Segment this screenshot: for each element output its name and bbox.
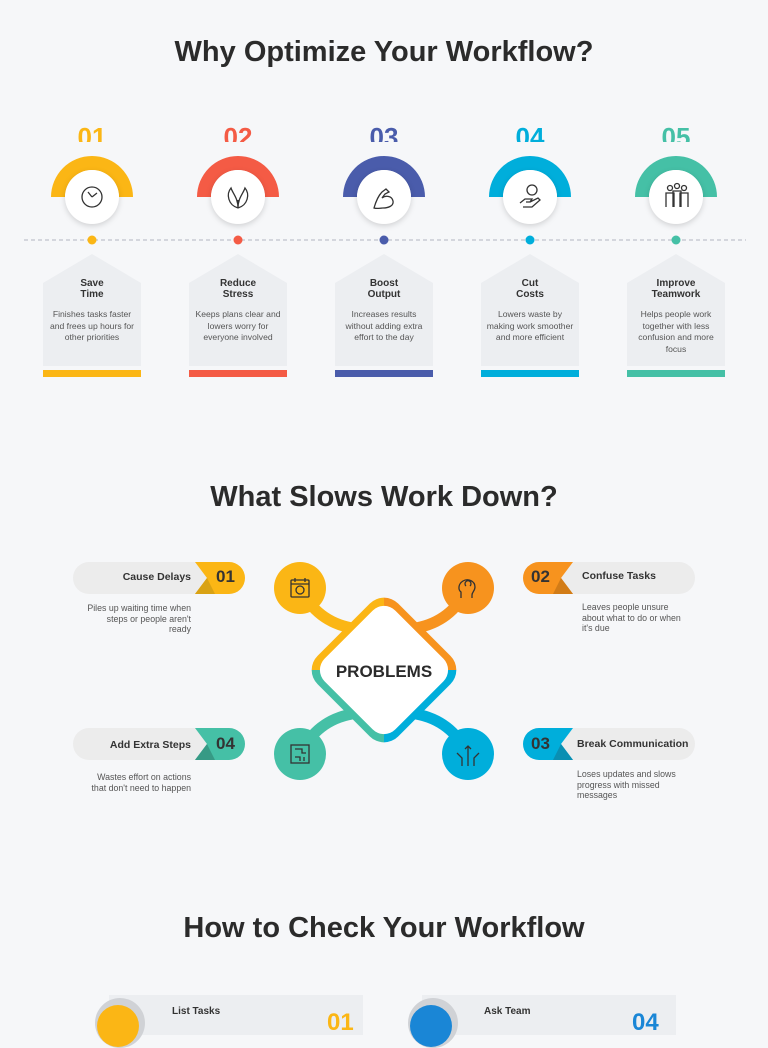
title: what slows work down: What Slows Work Down?	[210, 481, 558, 513]
step 04 cut costs: Cut	[522, 278, 538, 289]
step 01 save time: Save	[80, 278, 104, 289]
check card 04 ask team: Ask Team	[484, 1006, 531, 1017]
check card 01 list tasks: List Tasks	[172, 1006, 220, 1017]
step 03 boost output: Output	[368, 289, 400, 300]
problem 01 cause delays: 01	[216, 567, 235, 586]
problem 04 add extra steps: Wastes effort on actions that don't need to happen	[91, 772, 191, 792]
problem 01 cause delays: Cause Delays	[123, 571, 191, 583]
connectors	[300, 588, 468, 754]
title: how to check: How to Check Your Workflow	[183, 912, 585, 944]
check card 01 list tasks: 01	[327, 1009, 354, 1036]
step 05 improve teamwork: Helps people work together with less confusion and more focus	[638, 309, 714, 354]
step 04 cut costs	[481, 122, 579, 377]
step 02 reduce stress: Stress	[223, 289, 253, 300]
circles	[274, 562, 326, 614]
step 04 cut costs: Lowers waste by making work smoother and more efficient	[487, 309, 573, 342]
step 01 save time: Finishes tasks faster and frees up hours for other priorities	[50, 309, 134, 342]
check card 04 ask team	[408, 995, 676, 1048]
diamond ring	[312, 598, 456, 742]
step 03 boost output	[335, 122, 433, 377]
problem 04 add extra steps: Add Extra Steps	[110, 739, 191, 751]
step 03 boost output: Increases results without adding extra effort to the day	[346, 309, 422, 342]
problem 01 cause delays: Piles up waiting time when steps or people aren't ready	[87, 603, 191, 634]
check card 01 list tasks	[95, 995, 363, 1048]
problem 02 confuse tasks: 02	[531, 567, 550, 586]
problem 01 cause delays	[73, 562, 245, 634]
problem 03 break communication	[523, 728, 695, 800]
step 05 improve teamwork: Improve	[657, 278, 695, 289]
timeline dashed line	[24, 239, 746, 241]
step 02 reduce stress: Keeps plans clear and lowers worry for everyone involved	[195, 309, 281, 342]
problems diagram	[274, 562, 494, 780]
step 05 improve teamwork: Teamwork	[652, 289, 700, 300]
step 02 reduce stress: Reduce	[220, 278, 256, 289]
problem icons	[291, 578, 479, 766]
arcs	[51, 156, 717, 197]
step 04 cut costs: Costs	[516, 289, 544, 300]
icons	[82, 184, 688, 208]
step 01 save time: Time	[80, 289, 104, 300]
problem 02 confuse tasks: Confuse Tasks	[582, 570, 656, 582]
problem 03 break communication: Break Communication	[577, 738, 688, 750]
problem 04 add extra steps	[73, 728, 245, 793]
check card 04 ask team: 04	[632, 1009, 659, 1036]
card shapes	[43, 254, 725, 366]
problem 03 break communication: Loses updates and slows progress with missed messages	[577, 769, 676, 800]
step 03 boost output: Boost	[370, 278, 398, 289]
step 01 save time	[43, 122, 725, 377]
problem 03 break communication: 03	[531, 734, 550, 753]
problem 02 confuse tasks	[523, 562, 695, 633]
step 02 reduce stress	[189, 122, 287, 377]
dots	[88, 236, 96, 244]
problem 02 confuse tasks: Leaves people unsure about what to do or when it's due	[582, 602, 681, 633]
problem 04 add extra steps: 04	[216, 734, 235, 753]
step 05 improve teamwork	[627, 122, 725, 377]
problems diagram: PROBLEMS	[336, 662, 432, 681]
title: why optimize: Why Optimize Your Workflow?	[175, 36, 593, 68]
